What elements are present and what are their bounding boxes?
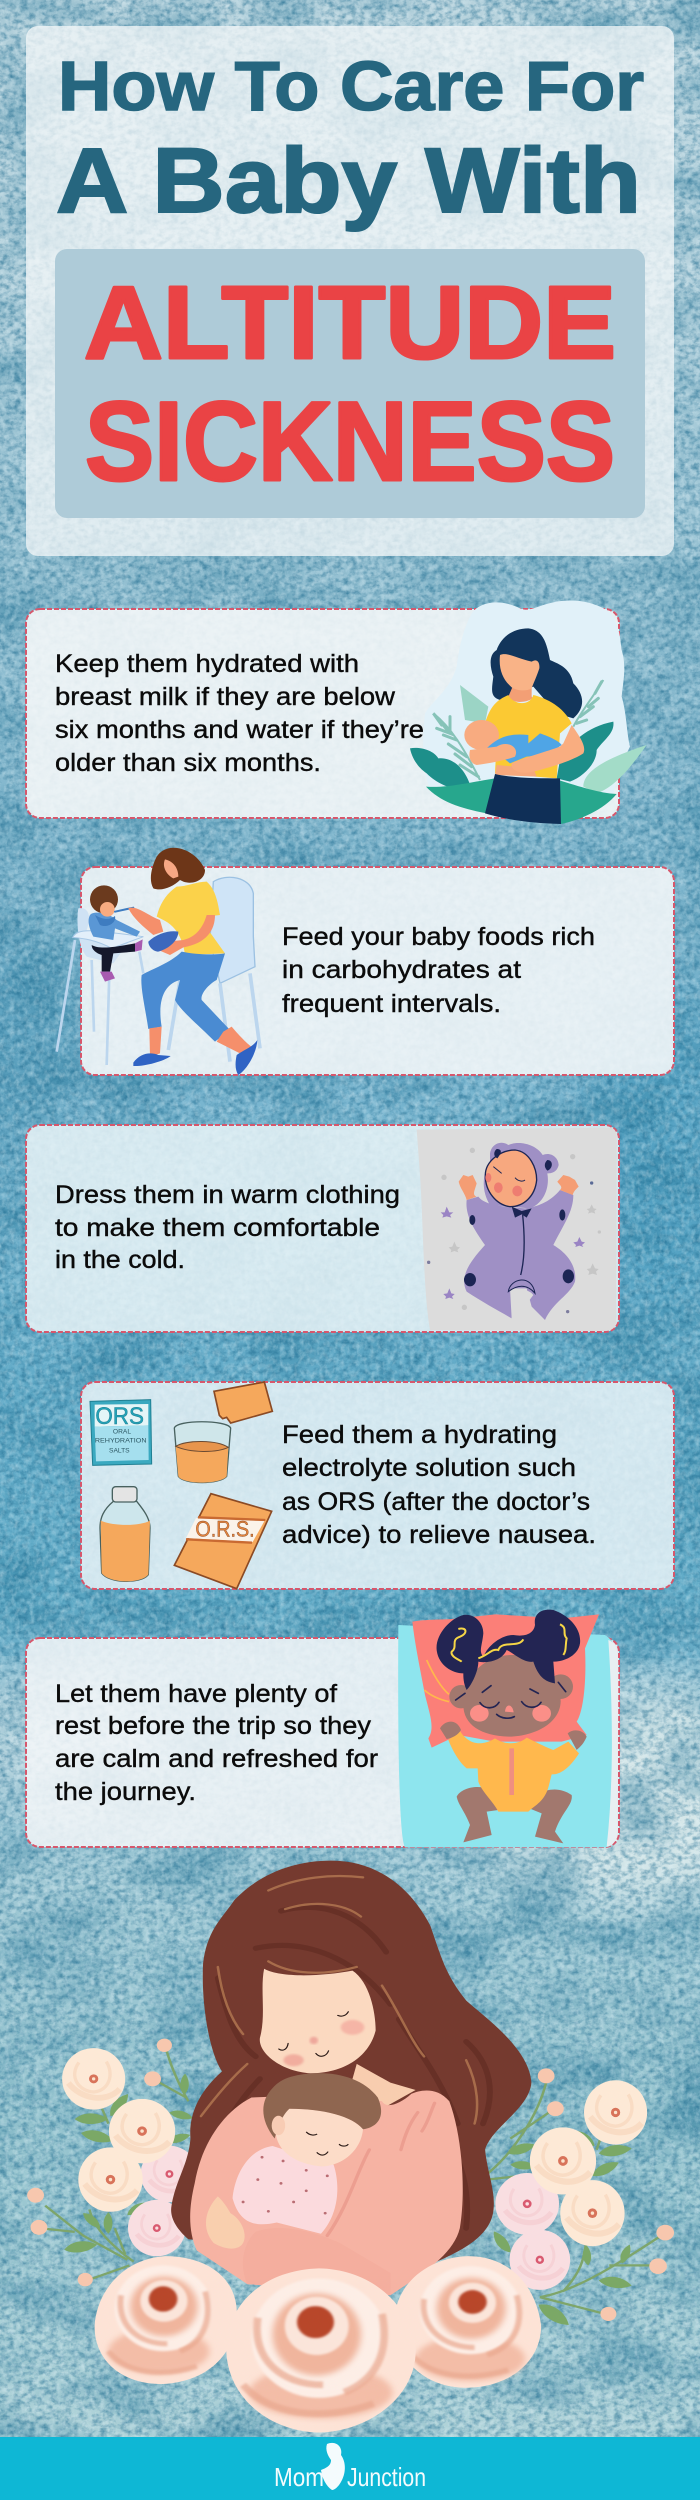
- arm and hand: [206, 2196, 390, 2295]
- icon: baby in purple sleepsuit: [417, 1128, 617, 1331]
- title line 4: SICKNESS: [85, 379, 615, 504]
- card 5 text: the journey.: [55, 1778, 196, 1806]
- card 5 text: [55, 1680, 378, 1806]
- ORS box: ORS: [95, 1403, 144, 1430]
- card 3 text: Dress them in warm clothing: [55, 1181, 400, 1209]
- ORS box: REHYDRATION: [95, 1438, 147, 1445]
- ORS box: ORAL: [113, 1428, 131, 1435]
- highlight box: [55, 249, 645, 518]
- card 5 text: rest before the trip so they: [55, 1712, 372, 1740]
- ORS box: [90, 1400, 152, 1465]
- card 5: rest: [26, 1638, 619, 1847]
- title line 1: How To Care For: [58, 47, 644, 125]
- glass: [174, 1422, 231, 1483]
- icon: mother breastfeeding: [410, 600, 647, 824]
- icon: mother feeding child in high chair: [57, 848, 260, 1075]
- baby's head: [263, 2073, 381, 2167]
- card 4 text: electrolyte solution such: [282, 1454, 576, 1482]
- ORS sachet: O.R.S.: [195, 1517, 255, 1542]
- dress: [190, 2090, 463, 2295]
- card 1 text: six months and water if they’re: [55, 716, 424, 744]
- card 1: breast milk and water: [26, 609, 619, 818]
- icon: sleeping baby on pillow: [398, 1610, 618, 1847]
- card 4: ORS: [81, 1382, 674, 1589]
- card 4 text: as ORS (after the doctor’s: [282, 1488, 590, 1516]
- mother's face: [260, 1969, 416, 2109]
- baby body: [233, 2146, 337, 2234]
- card 2 text: [282, 923, 595, 1018]
- icon: ORS packets, glass and bottle: [90, 1382, 272, 1589]
- card 1 text: Keep them hydrated with: [55, 650, 359, 678]
- illustration: mother cradling baby with roses: [27, 1861, 674, 2433]
- logo icon: [321, 2443, 345, 2490]
- bottle: [100, 1487, 150, 1581]
- card 5 text: Let them have plenty of: [55, 1680, 337, 1708]
- header panel: [26, 26, 674, 556]
- card 3 text: [55, 1181, 400, 1274]
- large roses: [95, 2256, 541, 2433]
- card 3 text: in the cold.: [55, 1246, 185, 1274]
- logo wordmark: Junction: [347, 2462, 426, 2492]
- card 1 text: older than six months.: [55, 749, 321, 777]
- ORS box: SALTS: [109, 1448, 130, 1455]
- flowers left: [27, 2039, 198, 2286]
- card 2 text: Feed your baby foods rich: [282, 923, 595, 951]
- logo wordmark: Mom: [274, 2462, 324, 2492]
- card 2: carbohydrates: [81, 867, 674, 1075]
- card 1 text: [55, 650, 424, 777]
- title line 2: A Baby With: [56, 130, 641, 232]
- card 2 text: in carbohydrates at: [282, 956, 521, 984]
- card 3: warm clothing: [26, 1125, 619, 1332]
- sachet: [214, 1382, 272, 1423]
- ORS sachet: [174, 1494, 272, 1589]
- card 5 text: are calm and refreshed for: [55, 1745, 378, 1773]
- card 2 text: frequent intervals.: [282, 990, 501, 1018]
- card 3 text: to make them comfortable: [55, 1214, 380, 1242]
- footer bar: [0, 2437, 700, 2500]
- card 1 text: breast milk if they are below: [55, 683, 396, 711]
- flowers right: [487, 2068, 674, 2330]
- card 4 text: advice) to relieve nausea.: [282, 1521, 596, 1549]
- hair: [171, 1861, 531, 2262]
- card 4 text: [282, 1421, 596, 1549]
- card 4 text: Feed them a hydrating: [282, 1421, 557, 1449]
- title line 3: ALTITUDE: [84, 265, 616, 380]
